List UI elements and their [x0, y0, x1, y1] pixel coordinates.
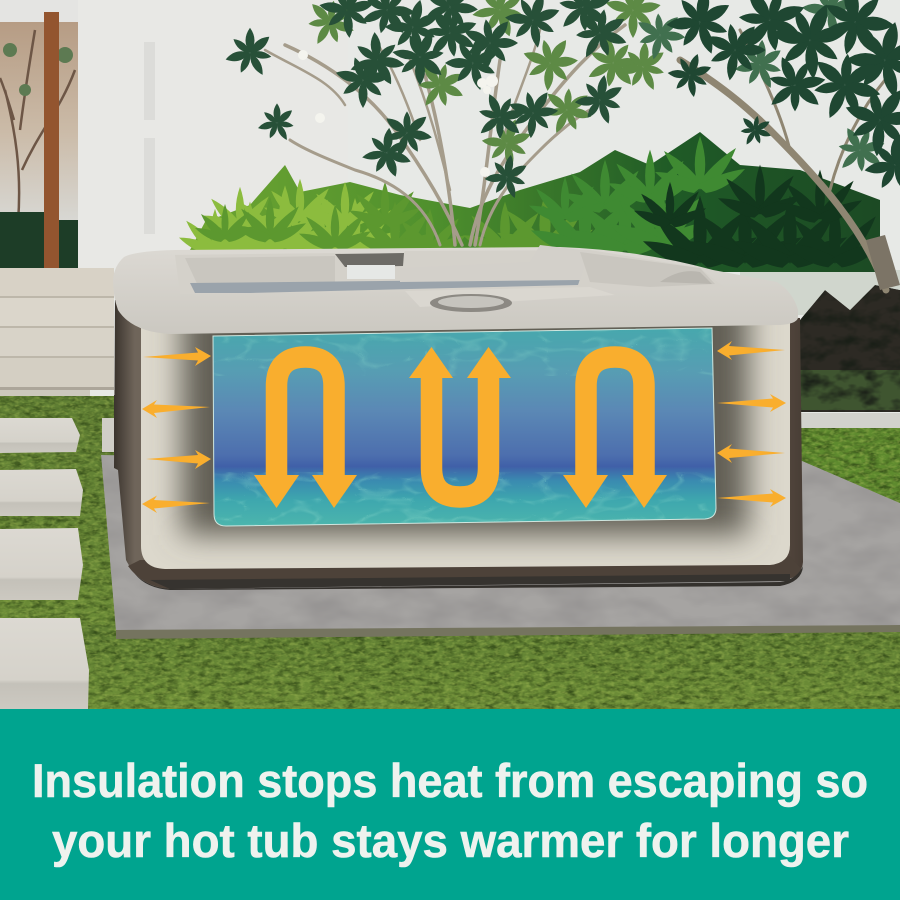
arrows: heat reflected by insulation: [142, 341, 786, 513]
middle loop: [432, 376, 488, 497]
arrows: water circulation: [254, 347, 667, 508]
concrete pad: [101, 455, 900, 632]
foliage: right tree: [625, 0, 900, 290]
headline: your hot tub stays warmer for longer: [52, 814, 849, 867]
hot tub: [113, 245, 803, 590]
tub cabinet: [114, 300, 803, 589]
banner: [0, 709, 900, 900]
foliage: hedge behind tub: [179, 132, 886, 272]
water panel: [213, 328, 718, 527]
right loop: [586, 357, 644, 480]
lawn: [0, 396, 116, 710]
insulation cutaway: [141, 324, 790, 569]
headline: Insulation stops heat from escaping so: [32, 754, 868, 807]
left loop: [276, 357, 334, 480]
tub top shell: [113, 247, 798, 334]
foliage: frangipani tree: [224, 0, 668, 245]
right planter wall: [740, 270, 900, 315]
steps: [0, 268, 114, 298]
stepping stones: [0, 418, 80, 453]
background: garden photo scene: [0, 0, 900, 710]
headline: [32, 754, 868, 867]
